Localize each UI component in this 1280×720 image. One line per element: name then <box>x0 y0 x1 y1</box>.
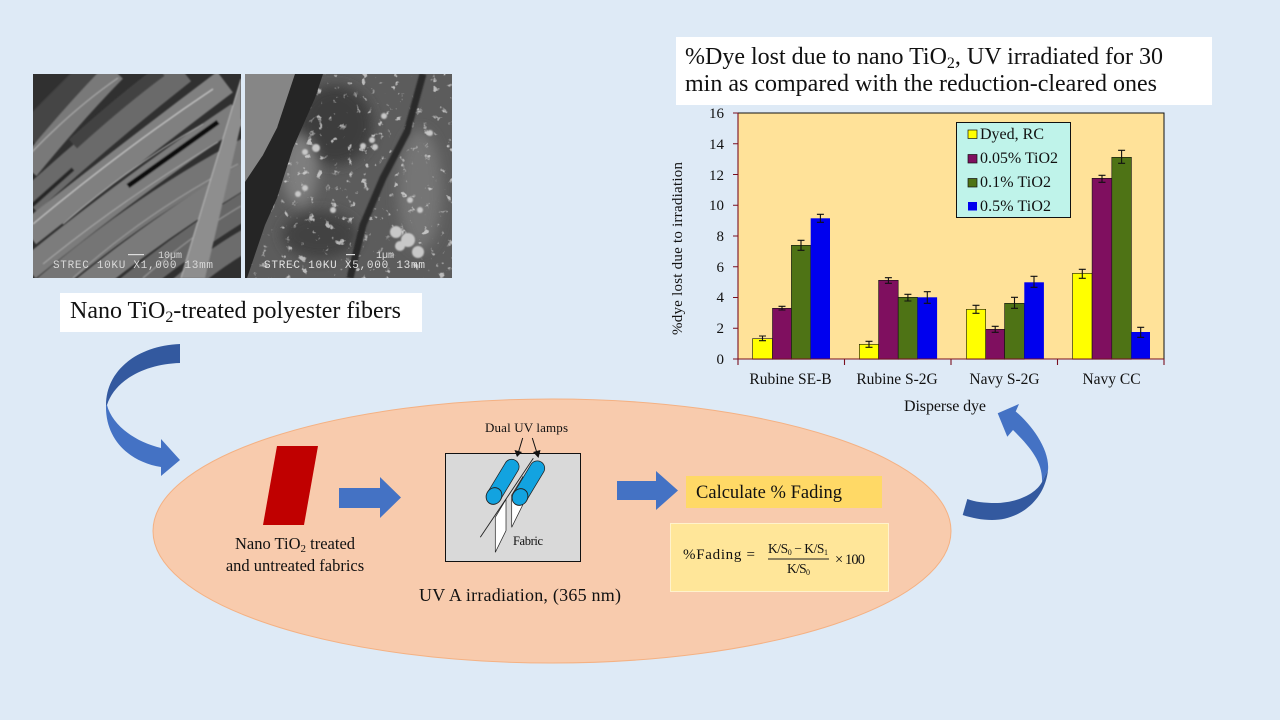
formula box: 0 <box>806 568 810 577</box>
formula box: × 100 <box>835 552 865 568</box>
y axis tick labels: 14 <box>709 137 724 153</box>
SEM scale caption: STREC 10KU X1,000 13mm <box>53 260 213 272</box>
x axis category labels: Rubine S-2G <box>856 371 938 388</box>
fabric label in diagram: Fabric <box>513 534 543 548</box>
calculate fading box <box>686 476 882 508</box>
legend: 0.5% TiO2 <box>980 198 1051 215</box>
formula box: 1 <box>824 548 828 557</box>
x axis title: Disperse dye <box>904 398 986 415</box>
caption: treated fibers: Nano TiO <box>70 298 165 324</box>
chart title: , UV irradiated for 30 <box>955 44 1163 70</box>
fabric label: Nano TiO <box>235 534 301 553</box>
curved arrow: fibers to process <box>106 344 180 476</box>
bars: Navy CC <box>1072 157 1150 359</box>
caption: treated fibers: -treated polyester fibers <box>173 298 401 324</box>
error bars <box>759 150 1144 347</box>
fabric label: 2 <box>301 543 306 555</box>
chart title <box>676 37 1212 105</box>
SEM micrograph: 5000x fibers with TiO2 particles <box>245 74 452 278</box>
x axis category labels: Navy CC <box>1082 371 1141 388</box>
formula box: %Fading = <box>683 547 755 563</box>
chart title: 2 <box>947 55 955 72</box>
SEM scale caption: 1µm <box>376 251 394 262</box>
UV irradiation label: UV A irradiation, (365 nm) <box>419 585 621 606</box>
legend: 0.1% TiO2 <box>980 174 1051 191</box>
arrow: fabric to UV box <box>339 477 401 518</box>
y axis tick labels: 2 <box>716 321 724 337</box>
x axis category labels: Navy S-2G <box>969 371 1040 388</box>
y axis tick labels: 12 <box>709 168 724 184</box>
lamp left <box>483 467 512 507</box>
x axis category labels: Rubine SE-B <box>749 371 832 388</box>
bars: Rubine SE-B <box>752 218 830 359</box>
SEM scale caption <box>54 252 212 270</box>
formula box: K/S <box>787 561 807 576</box>
lamp pointer arrows <box>514 438 540 458</box>
legend: Dyed, RC <box>980 126 1044 143</box>
plot area <box>738 113 1164 359</box>
chart title: min as compared with the reduction-cleared ones <box>685 71 1157 97</box>
y axis tick labels: 16 <box>709 106 724 122</box>
y axis tick labels: 8 <box>716 229 724 245</box>
caption: treated fibers <box>60 293 422 332</box>
y axis tick labels: 10 <box>709 198 724 214</box>
SEM scale caption <box>264 252 424 270</box>
UV irradiation diagram <box>446 420 580 562</box>
axes and ticks <box>733 113 1164 365</box>
caption: treated fibers: 2 <box>165 309 173 326</box>
fabric label <box>226 534 364 575</box>
x axis category labels <box>749 371 1141 388</box>
fabric label: and untreated fabrics <box>226 556 364 575</box>
fabric travel line <box>480 458 533 537</box>
bars: Rubine S-2G <box>859 280 937 359</box>
y axis title: %dye lost due to irradiation <box>670 162 686 335</box>
SEM scale caption: STREC 10KU X5,000 13mm <box>264 260 425 272</box>
formula box: 0 <box>788 548 792 557</box>
y axis tick labels: 6 <box>716 260 724 276</box>
SEM micrograph: 1000x fibers <box>33 74 241 278</box>
fabric label: treated <box>306 534 356 553</box>
bar chart: percent dye lost <box>670 106 1164 415</box>
curved arrow: calculation to chart <box>963 404 1048 520</box>
process ellipse <box>153 399 951 663</box>
formula box: K/S <box>768 541 788 556</box>
chart title: %Dye lost due to nano TiO <box>685 44 947 70</box>
calculate fading box: Calculate % Fading <box>696 483 842 503</box>
formula box <box>670 524 888 592</box>
bars: Navy S-2G <box>966 282 1044 359</box>
fabric swatch <box>263 446 318 525</box>
SEM scale caption: 10µm <box>158 251 182 262</box>
legend: 0.05% TiO2 <box>980 150 1058 167</box>
formula box: − K/S <box>791 541 824 556</box>
fabric strips <box>495 477 523 552</box>
arrow: UV box to calculation <box>617 471 678 510</box>
lamp label: Dual UV lamps <box>485 420 568 435</box>
lamp right <box>509 468 537 508</box>
y axis tick labels: 4 <box>716 290 724 306</box>
y axis tick labels: 0 <box>716 352 724 368</box>
y axis tick labels <box>709 106 724 368</box>
legend <box>956 122 1070 218</box>
